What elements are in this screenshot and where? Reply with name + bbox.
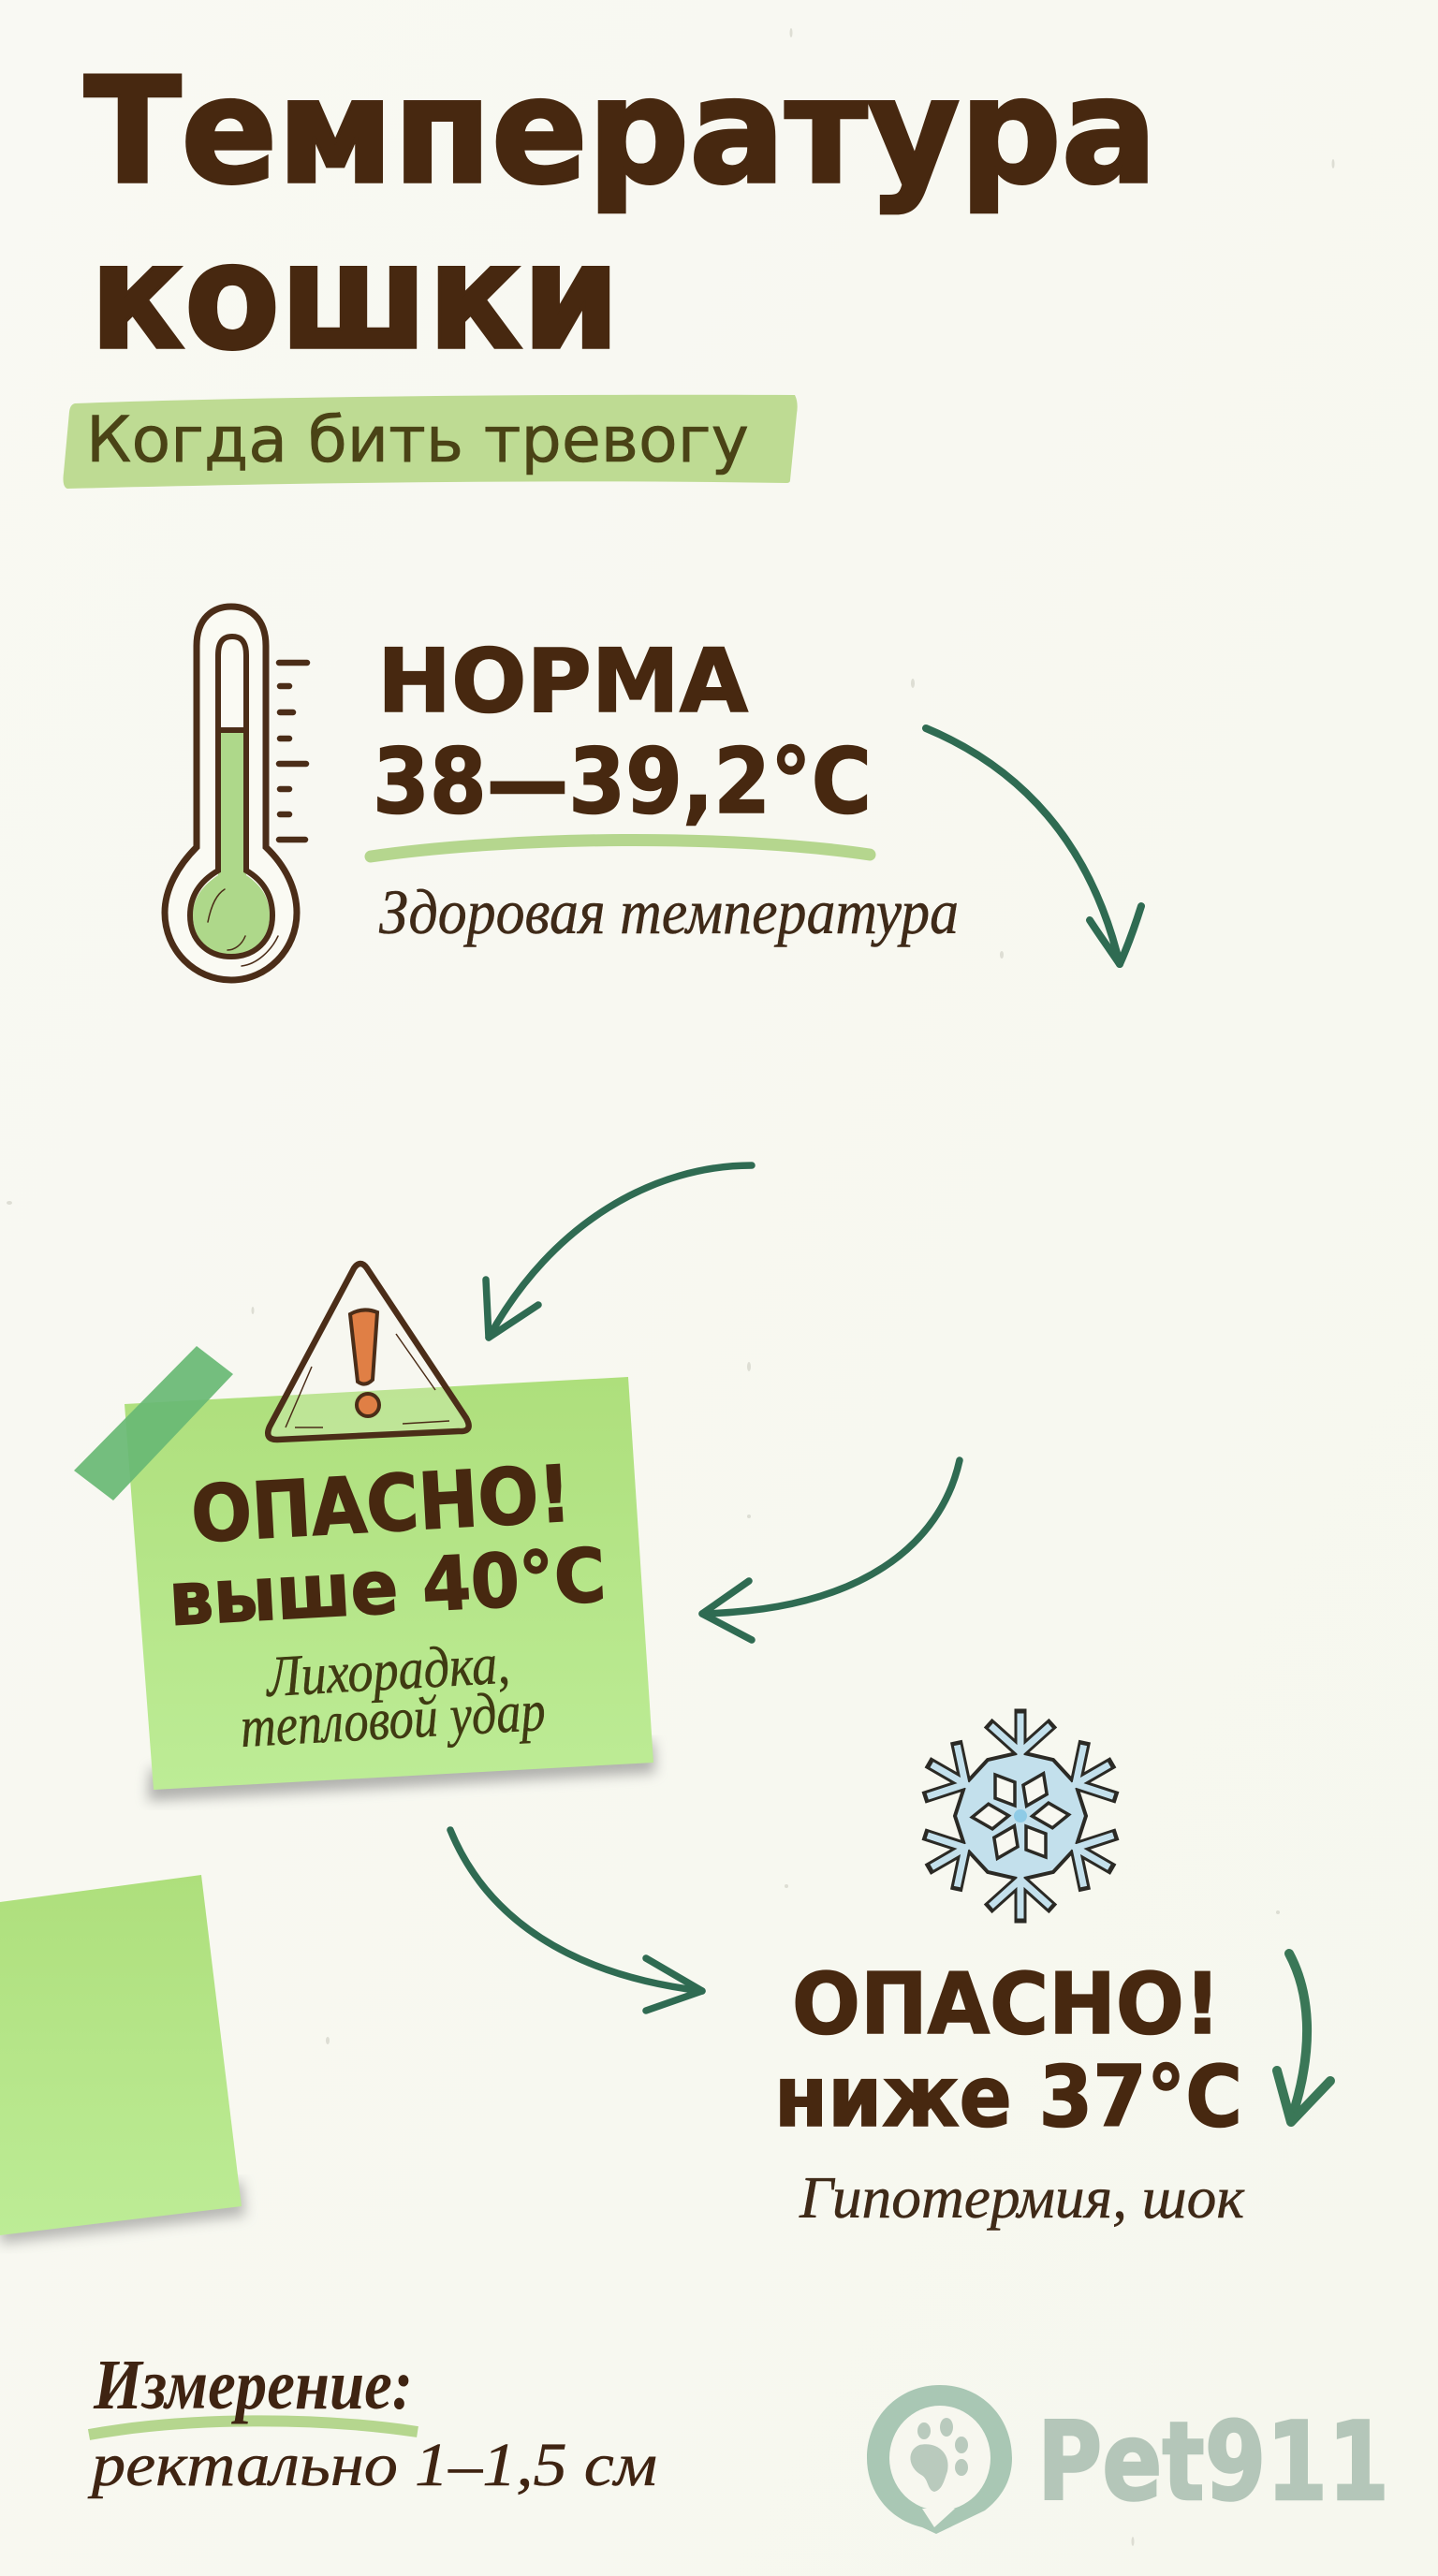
tape: [74, 1346, 233, 1500]
panel: fever sticky note: ОПАСНО!: [189, 1448, 573, 1560]
title: кошки: [90, 212, 620, 382]
title: [84, 46, 1157, 382]
icon: thermometer: [165, 607, 307, 980]
norm note: Здоровая температура: [379, 876, 959, 947]
norm heading: [373, 631, 872, 834]
logo mark: [867, 2385, 1012, 2534]
norm underline: [371, 840, 870, 856]
measurement note: Измерение:: [93, 2346, 413, 2424]
measurement note: ректально 1–1,5 см: [88, 2431, 657, 2499]
icon: snowflake: [918, 1715, 1123, 1917]
empty sticky note: [0, 1875, 245, 2244]
norm heading: НОРМА: [377, 631, 748, 733]
arrow: into warning: [486, 1165, 752, 1338]
norm heading: 38—39,2°C: [373, 729, 872, 834]
panel: fever sticky note: тепловой удар: [239, 1679, 547, 1760]
arrow: into fever note: [702, 1460, 960, 1640]
cold heading: ОПАСНО!: [792, 1955, 1221, 2054]
panel: fever sticky note: [74, 1264, 655, 1801]
cold heading: ниже 37°C: [774, 2048, 1242, 2146]
panel: fever sticky note: Лихорадка,: [263, 1632, 511, 1709]
panel: fever sticky note: выше 40°C: [167, 1532, 608, 1643]
arrow: fever to cold: [450, 1830, 702, 2011]
title: Температура: [84, 46, 1157, 216]
subtitle with highlight: Когда бить тревогу: [86, 403, 749, 477]
cold heading: [774, 1955, 1242, 2146]
cold note: Гипотермия, шок: [799, 2164, 1245, 2231]
arrow: norm to fever: [926, 728, 1141, 964]
icon: warning triangle: [268, 1264, 469, 1440]
arrow: down: [1277, 1954, 1330, 2122]
measurement note: [88, 2346, 657, 2499]
logo: Pet911: [867, 2385, 1389, 2534]
